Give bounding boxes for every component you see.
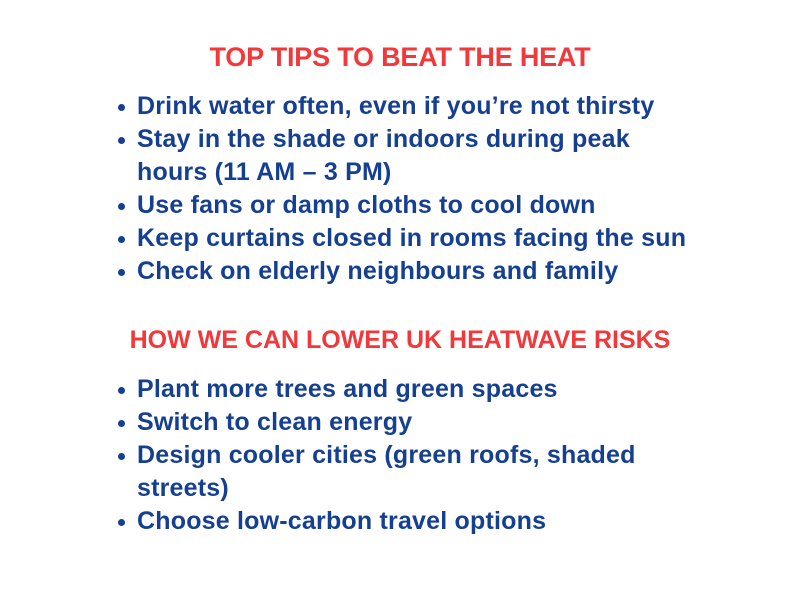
tip 3: Use fans or damp cloths to cool down [137,191,596,219]
tip 2: Stay in the shade or indoors during peak [137,125,630,153]
action 3: Design cooler cities (green roofs, shaded [137,441,636,469]
tip 4: Keep curtains closed in rooms facing the sun [137,224,686,252]
list: actions [118,375,636,535]
action 2: Switch to clean energy [137,408,412,436]
list: tips [118,92,686,285]
action 4: Choose low-carbon travel options [137,507,546,535]
tip 5: Check on elderly neighbours and family [137,257,618,285]
action 1: Plant more trees and green spaces [137,375,558,403]
tip 1: Drink water often, even if you’re not thirsty [137,92,654,120]
action 3 continuation: streets) [137,474,229,502]
heading: lower risks: HOW WE CAN LOWER UK HEATWAVE RISKS [130,326,670,354]
title: TOP TIPS TO BEAT THE HEAT [209,42,591,72]
tip 2 continuation: hours (11 AM – 3 PM) [137,158,392,186]
